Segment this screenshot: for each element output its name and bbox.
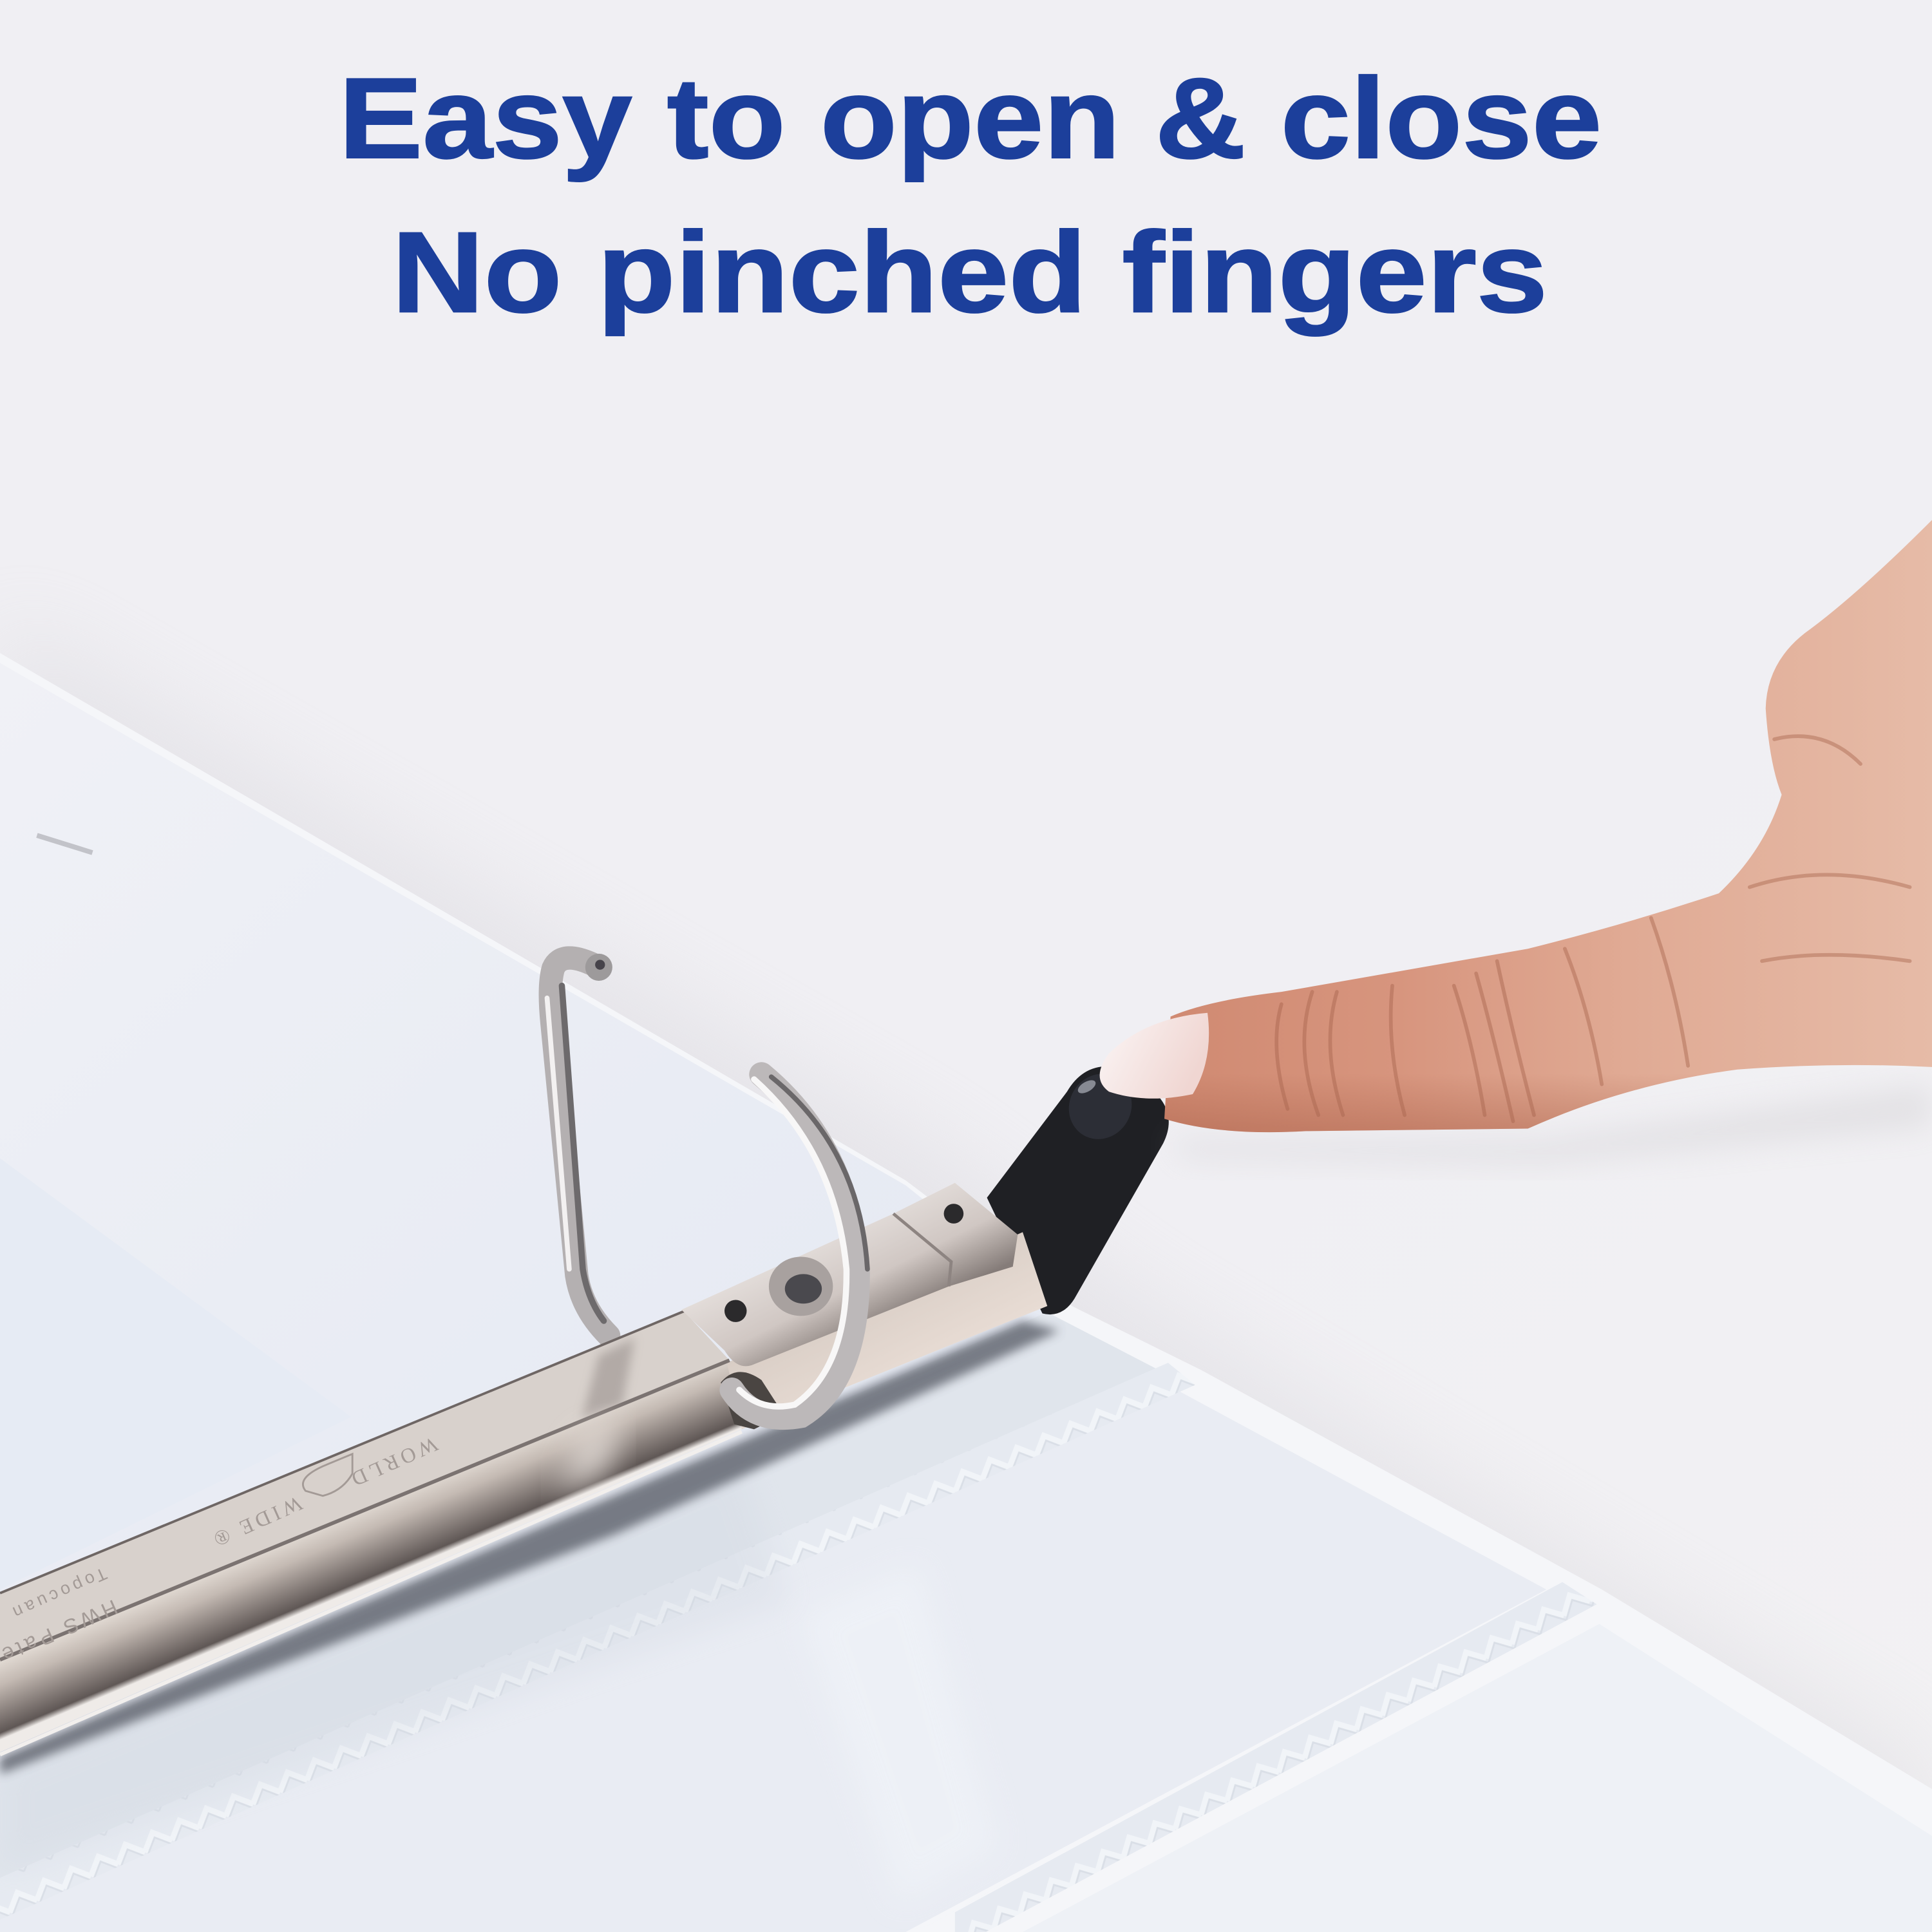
ring tip xyxy=(585,954,612,981)
plate hole right xyxy=(944,1204,963,1224)
lever hole xyxy=(1057,1062,1144,1151)
headline xyxy=(339,54,1602,336)
paper page xyxy=(0,663,1059,1774)
rail top reflection xyxy=(582,1338,634,1419)
rail glare xyxy=(554,1419,622,1497)
hand and finger xyxy=(1164,520,1932,1132)
rail stamped lettering xyxy=(0,1432,441,1684)
rail dark lines xyxy=(0,1310,742,1754)
rail stamped lettering: Topocuan xyxy=(6,1564,109,1624)
pressing hand xyxy=(1100,520,1932,1132)
rivet xyxy=(769,1257,833,1316)
headline line 2: No pinched fingers xyxy=(392,208,1548,336)
logo shield xyxy=(303,1454,352,1496)
hole glint xyxy=(1075,1077,1098,1096)
hook slot xyxy=(721,1372,784,1429)
clear pocket panel xyxy=(0,1390,1546,1932)
plate hole left xyxy=(724,1300,746,1322)
binder cover xyxy=(0,653,1932,1932)
metal ring mechanism xyxy=(0,954,1047,1754)
pocket seam right xyxy=(955,1582,1597,1932)
knuckle wrinkles xyxy=(1276,736,1910,1121)
page mark xyxy=(37,835,92,853)
binder xyxy=(0,653,1932,1932)
black lever tab xyxy=(987,1062,1169,1314)
rail top face xyxy=(0,1311,730,1661)
rail stamped lettering: WORLD xyxy=(345,1432,441,1492)
lower page lighter sheet xyxy=(0,1158,351,1589)
plate step line xyxy=(893,1214,951,1286)
rail stamped lettering: WIDE ® xyxy=(207,1491,305,1552)
pocket highlight xyxy=(0,1454,788,1873)
pocket reflection xyxy=(801,1565,998,1904)
rail right section xyxy=(727,1232,1047,1429)
nail bed xyxy=(1100,1013,1209,1099)
upper plate xyxy=(681,1183,1018,1366)
rear wire ring xyxy=(547,958,609,1336)
lower right cover panel xyxy=(1023,1624,1932,1932)
pocket seam left xyxy=(0,1363,1195,1920)
pocket area under rail xyxy=(0,1312,1183,1916)
rail main body xyxy=(0,1360,742,1752)
soft binder shadow on table xyxy=(0,616,1932,1932)
headline line 1: Easy to open & close xyxy=(339,54,1602,182)
front c ring xyxy=(732,1074,867,1417)
shadow under rail xyxy=(0,1321,1059,1774)
finger underside shade xyxy=(1164,986,1738,1132)
hand shadow on table xyxy=(1171,1084,1932,1164)
